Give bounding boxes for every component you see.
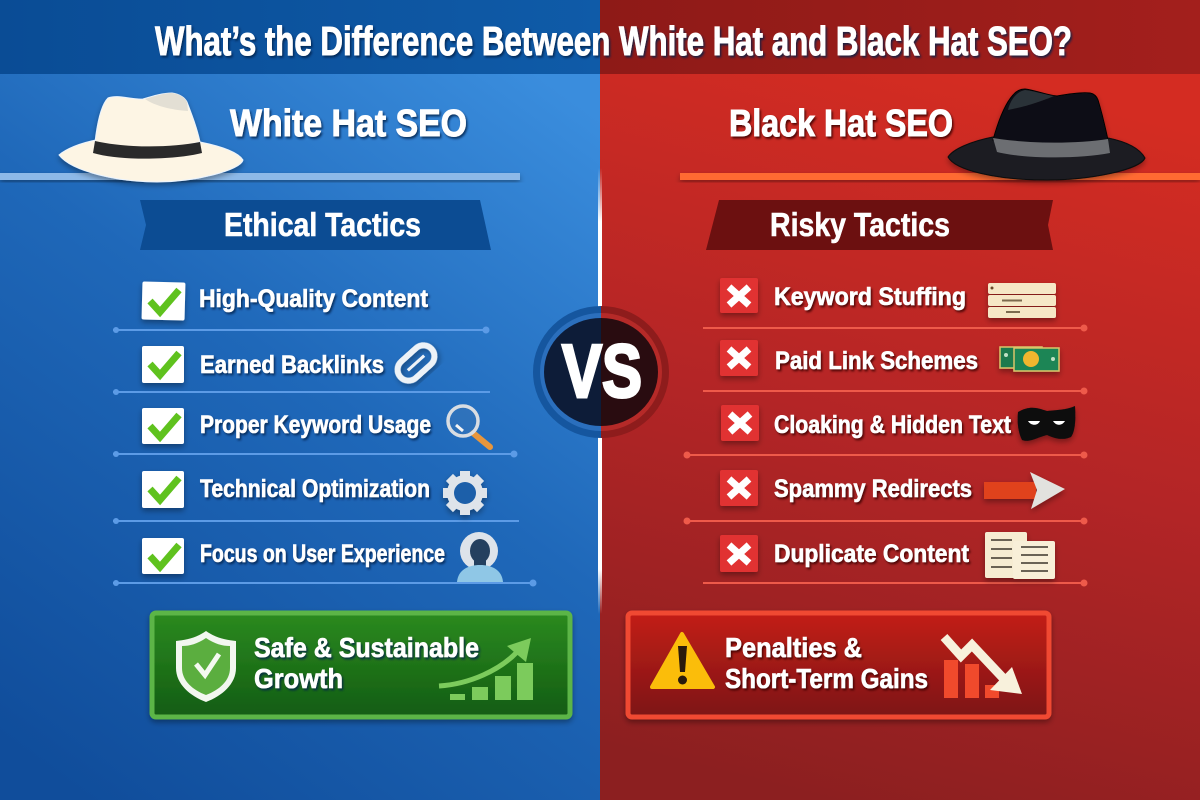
center divider line bbox=[598, 168, 602, 614]
icon: mask bbox=[1018, 406, 1075, 441]
heading: Ethical Tactics: Ethical Tactics bbox=[224, 206, 421, 243]
icon: keyword strips bbox=[988, 283, 1056, 318]
item: High-Quality Content bbox=[142, 281, 429, 321]
divider: white hat bbox=[0, 173, 520, 180]
icon: gear bbox=[443, 471, 487, 515]
item: Keyword Stuffing bbox=[720, 278, 1056, 318]
ribbon: ethical tactics bbox=[140, 200, 491, 250]
item: Cloaking & Hidden Text: Cloaking & Hidden Text bbox=[774, 411, 1012, 439]
icon: chain link bbox=[393, 341, 439, 385]
icon: magnifier bbox=[448, 406, 490, 447]
heading: Risky Tactics: Risky Tactics bbox=[770, 206, 950, 243]
item: Focus on User Experience bbox=[142, 532, 503, 582]
item: Paid Link Schemes bbox=[720, 340, 1059, 376]
panel: black hat header bbox=[680, 89, 1200, 180]
row lines right bbox=[684, 324, 1088, 586]
icon: shield bbox=[176, 631, 236, 702]
panel: black hat background bbox=[600, 0, 1200, 800]
callout: safe and sustainable growth bbox=[152, 613, 570, 717]
list: white hat tactics bbox=[113, 281, 536, 586]
item: Proper Keyword Usage bbox=[142, 406, 490, 447]
item: Spammy Redirects bbox=[720, 470, 1065, 509]
text: safe and sustainable growth: Safe & Sustainable bbox=[254, 632, 479, 663]
divider: black hat bbox=[680, 173, 1200, 180]
callout: penalties and short-term gains bbox=[628, 613, 1049, 717]
item: Proper Keyword Usage: Proper Keyword Usage bbox=[200, 411, 431, 439]
item: Technical Optimization: Technical Optimization bbox=[200, 475, 430, 503]
item: Earned Backlinks bbox=[142, 341, 439, 385]
VS badge bbox=[533, 306, 669, 438]
icon: declining chart bbox=[944, 637, 1022, 698]
icon: redirect arrow bbox=[984, 472, 1065, 509]
text: penalties and short-term gains: Penalties & bbox=[725, 632, 862, 663]
heading: White Hat SEO: White Hat SEO bbox=[230, 103, 467, 145]
item: Cloaking & Hidden Text bbox=[721, 405, 1075, 441]
row lines left bbox=[113, 326, 536, 586]
item: Keyword Stuffing: Keyword Stuffing bbox=[774, 283, 966, 311]
VS text: VS bbox=[562, 329, 642, 413]
panel: white hat header bbox=[0, 93, 520, 182]
item: Duplicate Content bbox=[720, 532, 1055, 579]
panel: white hat background bbox=[0, 0, 600, 800]
heading: Black Hat SEO: Black Hat SEO bbox=[729, 103, 953, 145]
icon: black hat bbox=[948, 89, 1145, 180]
text: penalties and short-term gains: Short-Term Gains bbox=[725, 663, 928, 694]
title band right bbox=[600, 0, 1200, 74]
icon: growth chart bbox=[439, 638, 533, 700]
item: Duplicate Content: Duplicate Content bbox=[774, 540, 970, 568]
list: black hat tactics bbox=[684, 278, 1088, 586]
icon: warning triangle bbox=[652, 634, 713, 687]
item: High-Quality Content: High-Quality Content bbox=[199, 285, 429, 313]
item: Earned Backlinks: Earned Backlinks bbox=[200, 351, 384, 379]
title band left bbox=[0, 0, 600, 74]
icon: money bbox=[1000, 347, 1059, 371]
item: Focus on User Experience: Focus on User Experience bbox=[200, 540, 445, 568]
text: safe and sustainable growth: Growth bbox=[254, 663, 343, 694]
item: Technical Optimization bbox=[142, 471, 487, 515]
item: Paid Link Schemes: Paid Link Schemes bbox=[775, 347, 978, 375]
text: safe and sustainable growth bbox=[254, 632, 479, 694]
item: Spammy Redirects: Spammy Redirects bbox=[774, 475, 972, 503]
ribbon: risky tactics bbox=[706, 200, 1053, 250]
icon: user bbox=[457, 532, 503, 582]
text: penalties and short-term gains bbox=[725, 632, 928, 694]
icon: white hat bbox=[59, 93, 243, 182]
icon: duplicate documents bbox=[985, 532, 1055, 579]
